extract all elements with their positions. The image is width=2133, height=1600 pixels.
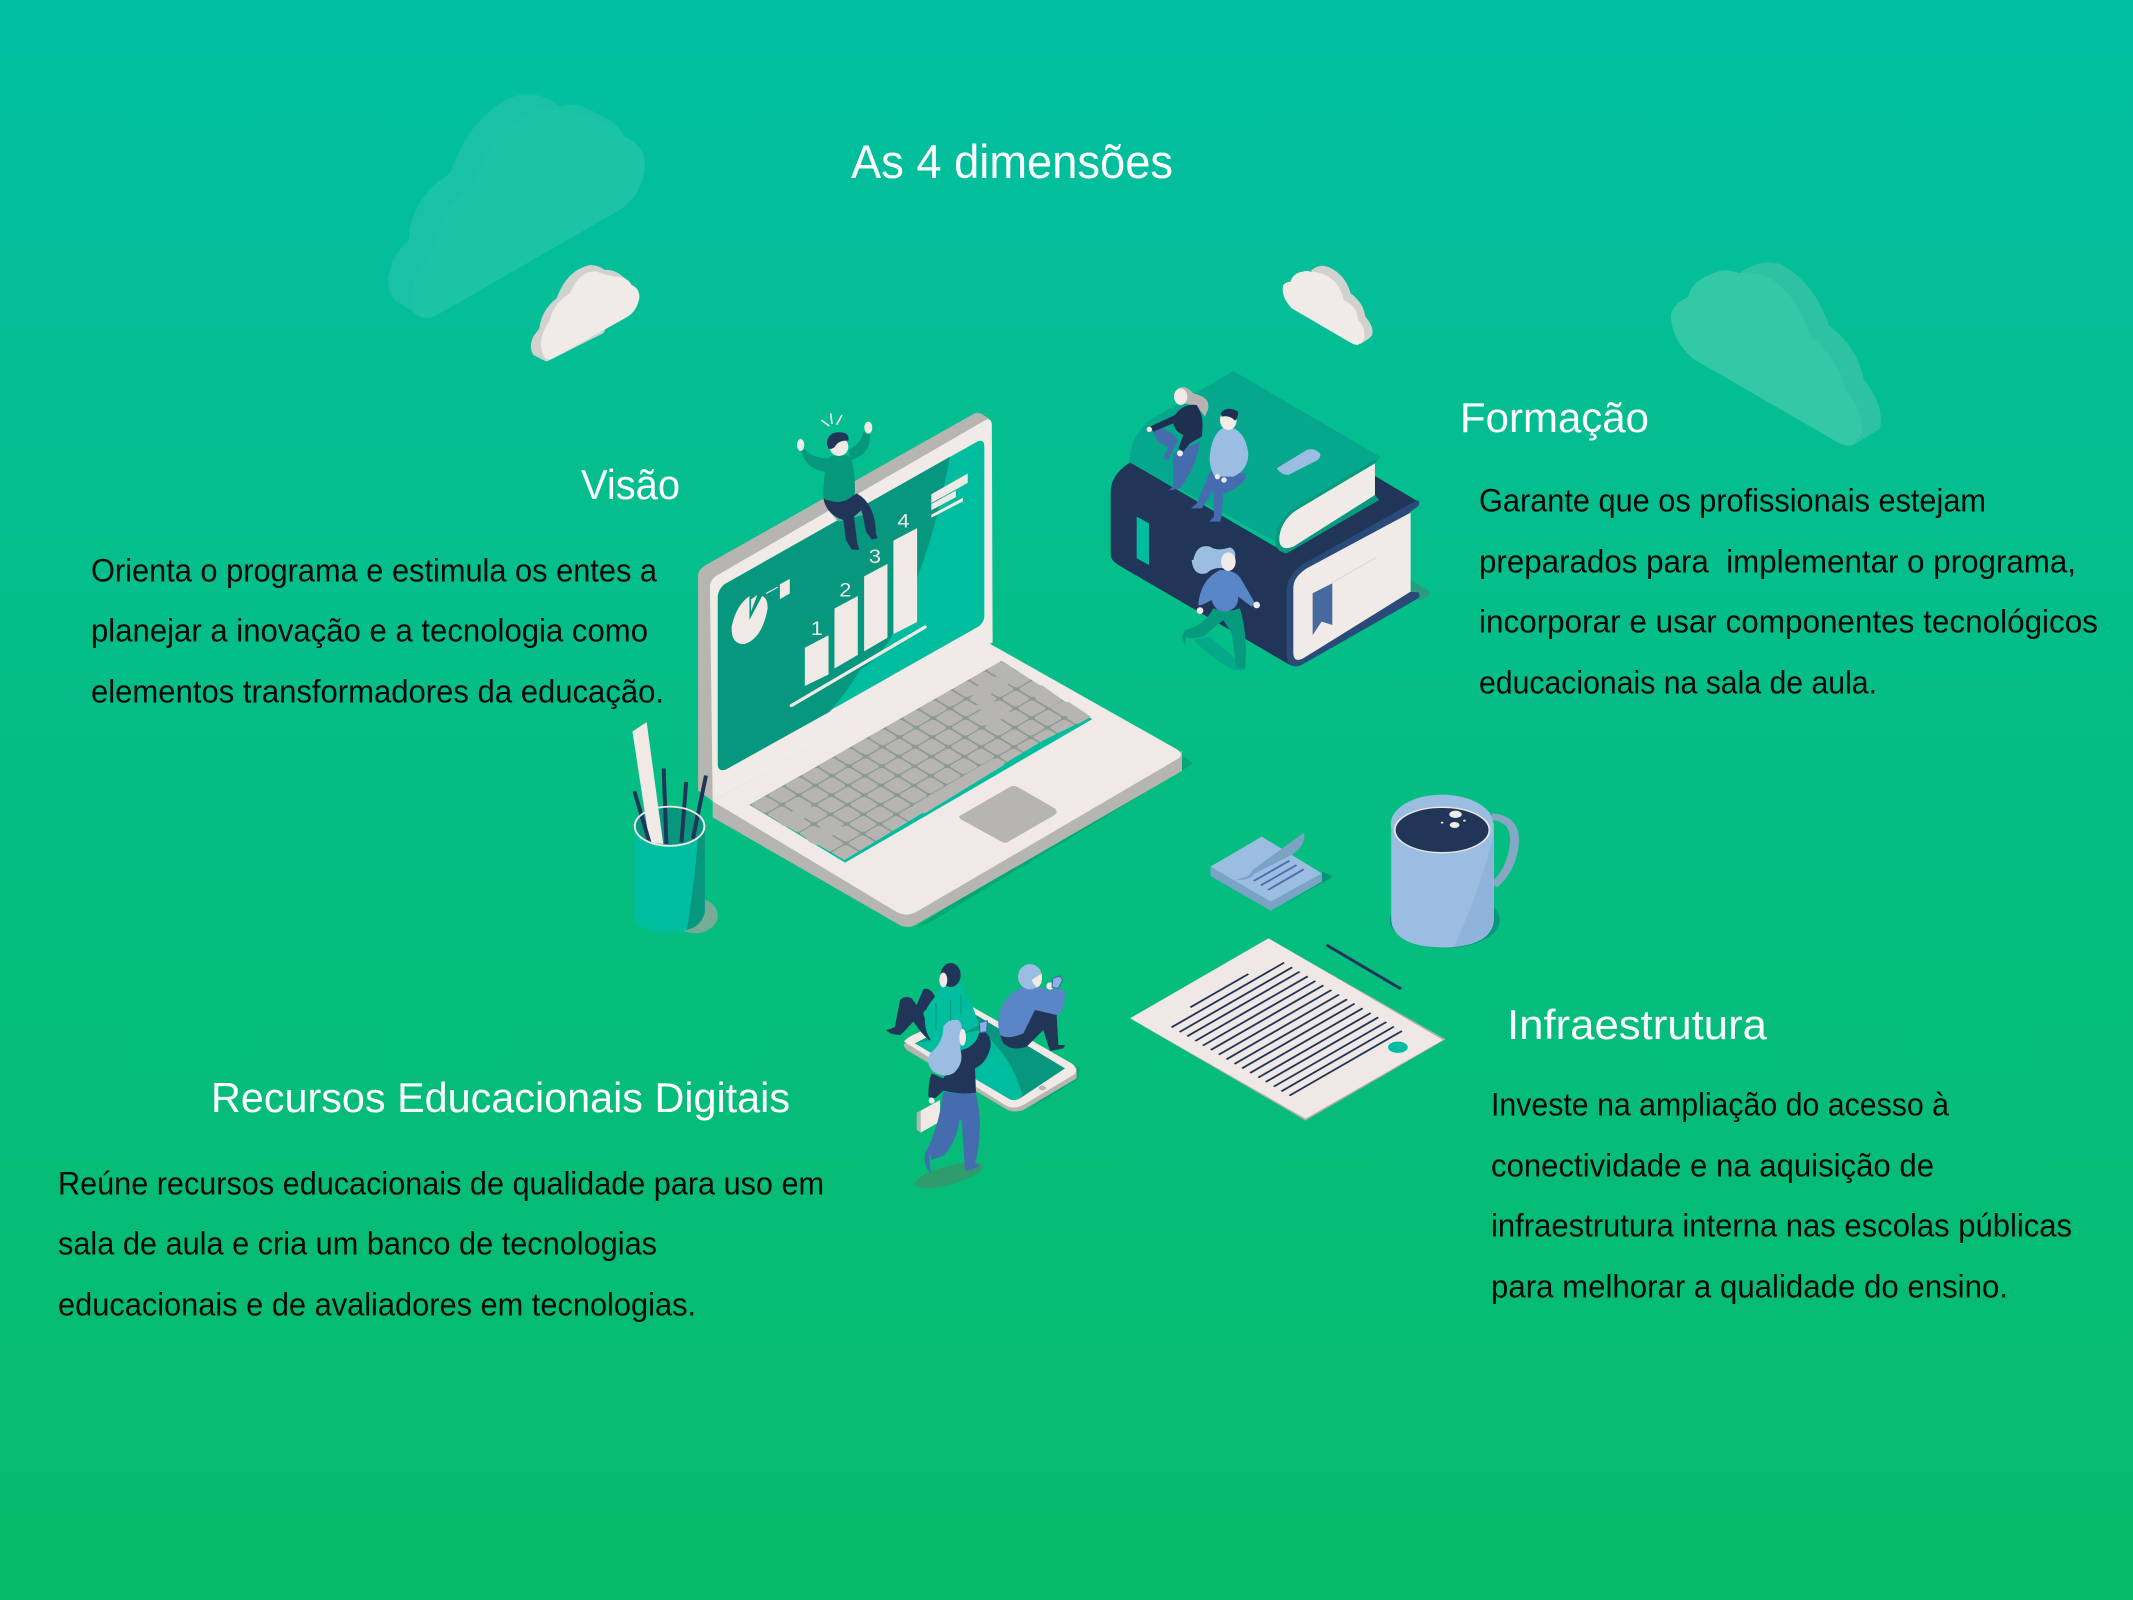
text: Recursos description: Reúne recursos educacionais de qualidade para uso em [58, 1166, 824, 1202]
section: Recursos Educacionais Digitais [58, 1074, 824, 1322]
laptop screen [718, 441, 984, 770]
coffee mug [1390, 795, 1515, 948]
bar chart on screen: 1 [811, 618, 823, 640]
person: standing woman [913, 1020, 991, 1193]
bar chart on screen: 3 [869, 546, 881, 568]
text: Formação description: preparados para implementar o programa, [1479, 544, 2076, 580]
text: Infraestrutura description: Investe na ampliação do acesso à [1491, 1086, 1949, 1122]
text: Infraestrutura description: infraestrutura interna nas escolas públicas [1491, 1208, 2072, 1244]
laptop illustration [632, 413, 1193, 933]
laptop shadow [916, 755, 1193, 927]
text: Infraestrutura description [1491, 1086, 2072, 1304]
laptop lid [698, 413, 993, 801]
section: Infraestrutura [1491, 1001, 2072, 1304]
icon: large faded cloud left [388, 94, 645, 318]
notepad [1210, 833, 1333, 911]
laptop base [713, 643, 1182, 927]
person on laptop [797, 413, 878, 550]
bar chart on screen: 4 [897, 510, 909, 532]
tablet with three people [886, 963, 1080, 1193]
small green book [1130, 371, 1380, 553]
pie chart on screen [732, 579, 790, 644]
heading: Formação: Formação [1460, 394, 1649, 441]
text: Formação description: educacionais na sala de aula. [1479, 664, 1877, 700]
bar chart on screen [791, 510, 925, 706]
person: woman sitting on books [1147, 387, 1208, 491]
keyboard [749, 661, 1092, 863]
text: Visão description: planejar a inovação e a tecnologia como [91, 612, 648, 648]
icon: large faded cloud right [1671, 262, 1881, 446]
person: man sitting on books [1191, 409, 1248, 522]
person: sitting with teal top [886, 963, 980, 1045]
text: Formação description: incorporar e usar componentes tecnológicos [1479, 604, 2098, 640]
text: Visão description: Orienta o programa e estimula os entes a [91, 552, 657, 588]
person: sitting with phone [998, 964, 1065, 1051]
heading: Visão: Visão [581, 461, 680, 508]
pen cup [632, 722, 718, 933]
text: Formação description: Garante que os profissionais estejam [1479, 482, 1986, 518]
bar chart on screen: 2 [839, 579, 851, 601]
text: Infraestrutura description: para melhorar a qualidade do ensino. [1491, 1268, 2008, 1304]
keyboard wide keys [777, 669, 1091, 845]
text: Visão description: elementos transformadores da educação. [91, 674, 664, 710]
heading: Infraestrutura: Infraestrutura [1507, 1001, 1768, 1048]
book shadow [1411, 580, 1430, 602]
text: Recursos description: educacionais e de avaliadores em tecnologias. [58, 1286, 696, 1322]
text lines on screen [931, 474, 968, 518]
person: walking woman [1182, 546, 1260, 671]
books illustration [1111, 371, 1430, 671]
heading: Recursos Educacionais Digitais: Recursos Educacionais Digitais [211, 1074, 790, 1121]
text: Recursos description: sala de aula e cria um banco de tecnologias [58, 1226, 657, 1262]
text: Recursos description [58, 1166, 824, 1322]
icon: small white cloud left [531, 265, 639, 362]
text: Visão description [91, 552, 664, 710]
section: Formação [1460, 394, 2098, 700]
icon: small white cloud right [1283, 266, 1373, 345]
text: Formação description [1479, 482, 2098, 700]
document with text lines and pen [1130, 938, 1446, 1121]
trackpad [959, 786, 1057, 843]
title: As 4 dimensões [851, 135, 1173, 188]
tablet [903, 1007, 1080, 1111]
large navy book [1111, 462, 1420, 666]
section: Visão [91, 461, 680, 710]
text: Infraestrutura description: conectividade e na aquisição de [1491, 1148, 1934, 1184]
